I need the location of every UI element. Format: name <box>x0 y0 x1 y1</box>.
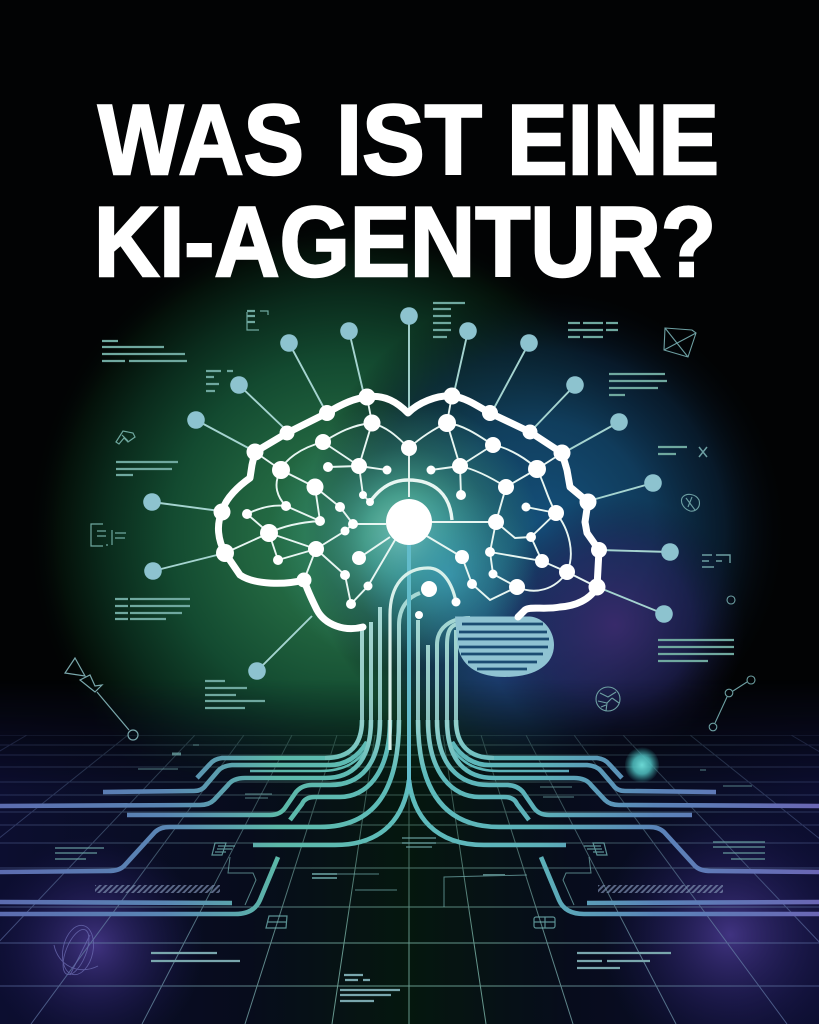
text bars top and right <box>433 303 734 661</box>
floor wires and tiny labels <box>55 745 765 907</box>
outer nodes <box>143 307 679 680</box>
title <box>94 85 719 298</box>
graph icon bottom left <box>65 658 138 740</box>
hatched band right <box>598 885 723 893</box>
stem lines <box>320 593 499 827</box>
scribble left <box>54 922 98 978</box>
circuit lines right <box>409 720 819 914</box>
floor icons <box>212 843 607 928</box>
title: WAS <box>98 85 304 196</box>
brain outline <box>218 396 599 629</box>
glowing spot <box>625 747 659 783</box>
floor text bars <box>151 953 671 1001</box>
title: KI-AGENTUR? <box>94 187 716 298</box>
title: EINE <box>507 85 719 196</box>
hatched band left <box>95 885 220 893</box>
central hub <box>386 499 432 545</box>
small icons right <box>596 328 755 731</box>
floor glow <box>0 680 819 1024</box>
brain nodes <box>214 388 607 619</box>
white stem arch <box>390 568 456 750</box>
small icons left <box>91 311 268 546</box>
perspective grid floor <box>0 735 819 1024</box>
connector rays <box>152 316 670 671</box>
striped oval <box>455 616 554 677</box>
circuit lines left <box>0 720 409 914</box>
text bars left <box>102 311 265 708</box>
center trunk line <box>407 540 411 790</box>
title: IST <box>336 85 482 196</box>
brain inner network <box>225 395 597 604</box>
